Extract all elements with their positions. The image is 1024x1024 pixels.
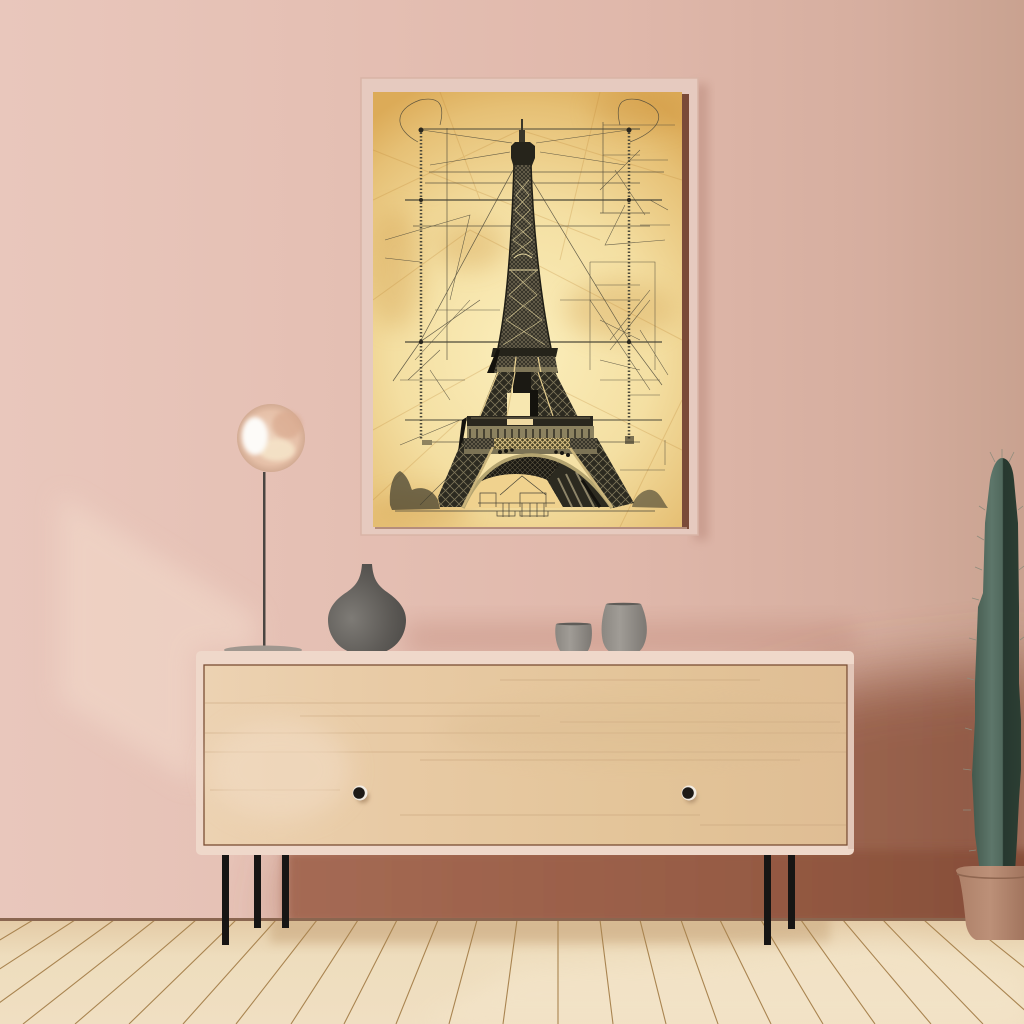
ground sketch	[395, 476, 655, 517]
trees	[390, 471, 668, 510]
cactus stem	[963, 449, 1024, 872]
poster paper	[367, 90, 690, 528]
furniture shadow on wall	[280, 622, 1024, 930]
sideboard body	[196, 651, 854, 855]
left knob	[352, 786, 369, 803]
lamp globe	[237, 404, 305, 472]
lamp base	[224, 646, 302, 654]
eiffel tower	[390, 119, 668, 517]
upper tower	[498, 165, 551, 348]
first platform	[467, 416, 594, 438]
arch opening	[463, 474, 563, 508]
floor	[0, 915, 1024, 1024]
tower base lattice, legs and arch	[438, 417, 634, 508]
small cup	[555, 622, 592, 653]
arch dark underside	[481, 456, 567, 507]
lamp stem	[263, 472, 266, 647]
arch tan band	[463, 455, 612, 508]
sunlight patch on wall	[60, 495, 255, 785]
cactus plant	[956, 449, 1024, 940]
tall cup	[602, 603, 647, 653]
right leg	[570, 438, 634, 508]
floor lamp	[224, 404, 305, 654]
blueprint construction lines	[385, 99, 675, 505]
poster frame	[361, 78, 708, 540]
legs between platforms	[479, 372, 578, 417]
second platform	[487, 348, 558, 373]
round vase	[328, 564, 406, 652]
sideboard legs	[222, 853, 795, 945]
plant pot	[956, 866, 1024, 940]
sideboard	[196, 651, 854, 945]
spire and cap	[511, 119, 535, 168]
right knob	[682, 786, 697, 803]
left leg	[438, 438, 493, 507]
drawer front	[204, 665, 847, 845]
